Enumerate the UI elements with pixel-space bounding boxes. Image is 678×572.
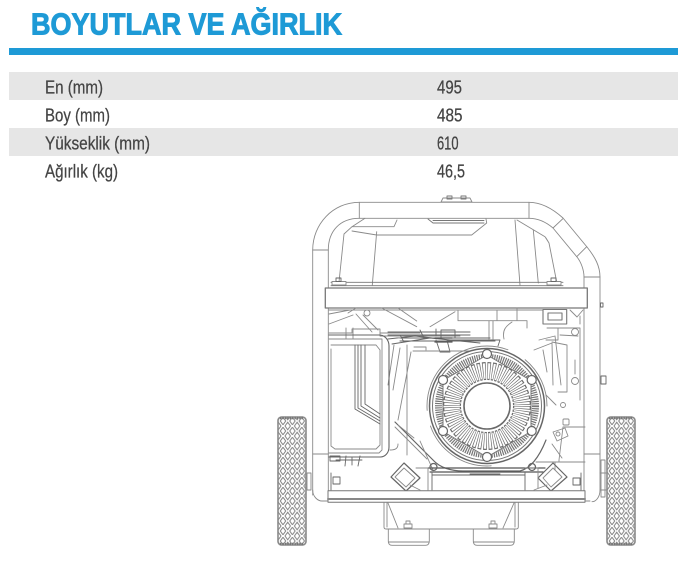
row: length bbox=[45, 104, 462, 126]
row: width bbox=[9, 72, 678, 100]
under-tank engine structure bbox=[329, 308, 543, 455]
row: width: En (mm) bbox=[45, 76, 103, 98]
row: weight: 46,5 bbox=[437, 160, 465, 182]
rubber feet bbox=[388, 529, 514, 545]
base support foot bbox=[384, 503, 518, 529]
row: length: Boy (mm) bbox=[45, 104, 110, 126]
generator line drawing bbox=[278, 196, 635, 545]
row: weight bbox=[45, 160, 465, 182]
right wheel bbox=[600, 417, 635, 545]
row: length: 485 bbox=[437, 104, 462, 126]
engine mounts bbox=[331, 463, 581, 491]
tubular frame bbox=[313, 202, 606, 502]
central hub bbox=[464, 383, 510, 429]
recoil starter / fan cover bbox=[430, 348, 544, 464]
specification table bbox=[9, 72, 678, 182]
fan louvers bbox=[452, 371, 522, 441]
left wheel bbox=[278, 417, 311, 545]
engine shroud bbox=[390, 346, 547, 472]
fuel tank bbox=[331, 218, 563, 286]
top handle bolts bbox=[441, 196, 472, 202]
row: weight: Ağırlık (kg) bbox=[45, 160, 118, 182]
upper frame crossbar bbox=[325, 288, 587, 308]
row: height: 610 bbox=[437, 132, 458, 154]
row: height: Yükseklik (mm) bbox=[45, 132, 150, 154]
right-side engine details bbox=[534, 310, 585, 470]
cover bolts bbox=[438, 350, 536, 462]
air filter box bbox=[329, 335, 389, 466]
lower frame base bbox=[328, 491, 585, 502]
row: width: 495 bbox=[437, 76, 462, 98]
title underline bar bbox=[9, 48, 678, 55]
row: height bbox=[9, 128, 678, 156]
title: BOYUTLAR VE AĞIRLIK bbox=[31, 6, 343, 42]
